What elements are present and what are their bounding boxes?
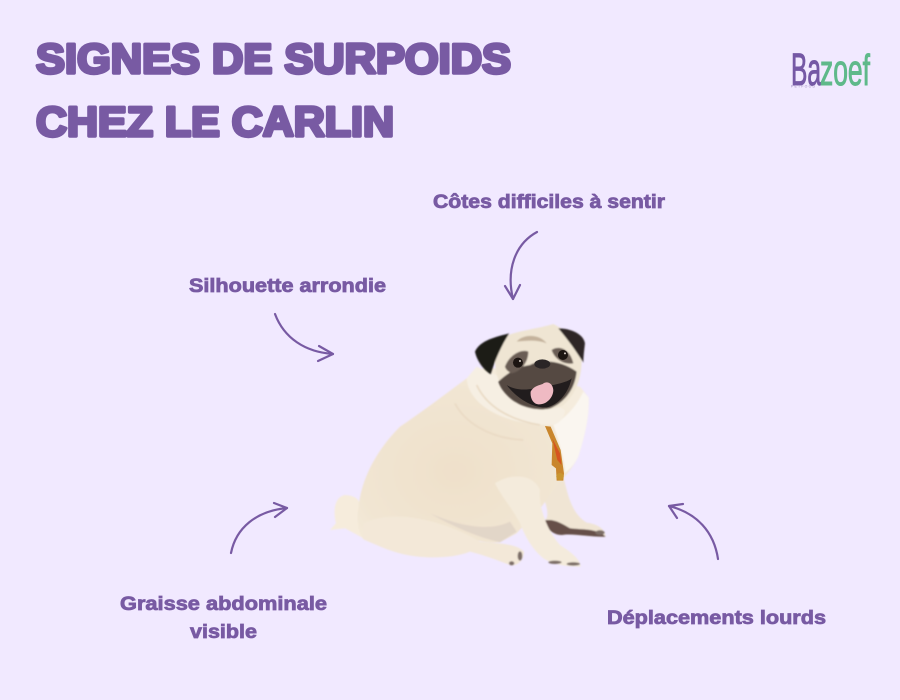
far hind leg bbox=[544, 477, 606, 537]
arrow: déplacements bbox=[669, 504, 718, 559]
eye patches bbox=[505, 351, 528, 373]
mouth bbox=[507, 378, 572, 407]
logo: Bazoef bbox=[791, 44, 870, 95]
chest white patch bbox=[553, 392, 589, 473]
title: CHEZ LE CARLIN bbox=[36, 98, 394, 145]
label: graisse abdominale visible bbox=[120, 593, 327, 643]
right ear bbox=[558, 328, 585, 363]
label: côtes difficiles à sentir: Côtes difficiles à sentir bbox=[433, 191, 665, 213]
logo: Bazoef: Ba bbox=[791, 44, 822, 95]
pug illustration bbox=[330, 324, 606, 567]
forehead wrinkle bbox=[517, 336, 547, 343]
belly shading bbox=[430, 513, 517, 542]
label: silhouette arrondie: Silhouette arrondie bbox=[189, 275, 386, 297]
label: graisse abdominale visible: visible bbox=[190, 621, 257, 643]
nose bbox=[534, 359, 550, 369]
arrow: côtes bbox=[505, 232, 537, 299]
body bbox=[358, 367, 589, 557]
hind leg and paw bbox=[363, 516, 524, 565]
label: déplacements lourds: Déplacements lourds bbox=[607, 607, 826, 629]
tail bbox=[330, 495, 367, 540]
arrow: graisse bbox=[231, 503, 287, 553]
label: graisse abdominale visible: Graisse abdominale bbox=[120, 593, 327, 615]
neck folds bbox=[467, 367, 565, 425]
collar tag bbox=[545, 426, 564, 481]
left ear bbox=[475, 333, 509, 374]
head bbox=[475, 324, 585, 410]
arrow: silhouette bbox=[275, 314, 333, 361]
tongue bbox=[531, 382, 553, 404]
muzzle bbox=[498, 362, 577, 409]
title: SIGNES DE SURPOIDS bbox=[36, 35, 511, 82]
logo: Bazoef: PETFOOD bbox=[791, 84, 815, 88]
eyes bbox=[513, 358, 523, 368]
toe claws bbox=[509, 530, 605, 566]
title bbox=[36, 35, 511, 145]
front leg and paw bbox=[495, 476, 581, 567]
